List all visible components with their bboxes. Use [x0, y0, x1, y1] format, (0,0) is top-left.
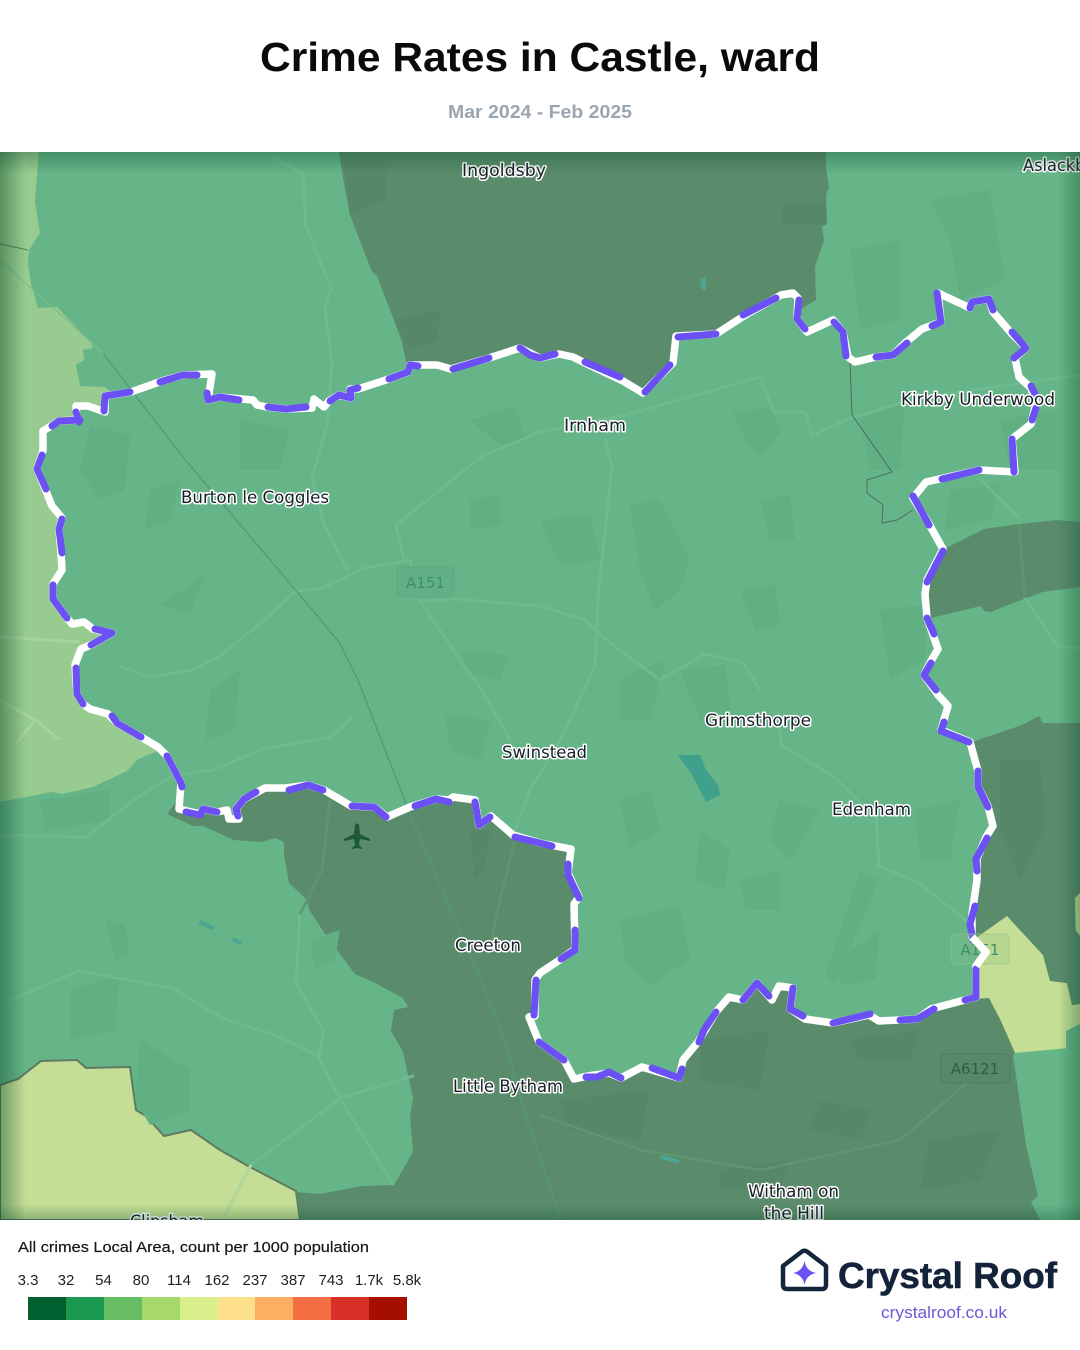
legend scale labels: 1.7k [355, 1272, 384, 1289]
woodland patches [40, 190, 1060, 1125]
roads [0, 157, 1080, 1184]
legend scale labels: 114 [167, 1272, 191, 1289]
legend scale labels: 237 [242, 1272, 268, 1289]
water: small ponds [198, 276, 706, 1163]
railway line [0, 260, 103, 353]
road shield: A6121: A6121 [951, 1060, 999, 1078]
place labels: Ingoldsby [462, 161, 546, 181]
legend scale labels: 32 [58, 1272, 74, 1289]
road shield: A151 east [951, 934, 1009, 964]
icon: airport plane [344, 823, 370, 849]
place labels: Edenham [832, 800, 911, 820]
legend scale labels: 387 [280, 1272, 306, 1289]
legend scale labels [18, 1272, 422, 1289]
region: dark green east band [900, 520, 1080, 630]
region: light green west [0, 152, 170, 802]
road shield: A151 east: A151 [961, 941, 999, 959]
place labels [130, 156, 1080, 1232]
road on yellow-green south-west [225, 1165, 251, 1215]
legend scale labels: 743 [318, 1272, 344, 1289]
ward fill [37, 293, 1036, 1079]
legend scale labels: 5.8k [393, 1272, 422, 1289]
boundary over shield [972, 937, 986, 966]
icon: house with star [783, 1251, 826, 1289]
region: yellow-green south-east [960, 916, 1080, 1053]
water: lake at Grimsthorpe [678, 755, 720, 802]
legend title: All crimes Local Area, count per 1000 population [18, 1239, 369, 1256]
place labels: Little Bytham [453, 1077, 563, 1097]
place labels: Kirkby Underwood [901, 390, 1055, 410]
legend scale labels: 162 [204, 1272, 230, 1289]
place labels: Grimsthorpe [705, 711, 811, 731]
area boundary line west [0, 244, 28, 250]
ward boundary: purple dashes [37, 293, 1036, 1078]
legend colour bar [28, 1297, 407, 1320]
road shield: A151 west [397, 567, 454, 597]
legend scale labels: 80 [133, 1272, 149, 1289]
roads on dark regions [300, 524, 1025, 1170]
roads on light green west [0, 637, 80, 745]
region: dark green east [960, 716, 1080, 1005]
place labels: Witham on [748, 1182, 839, 1202]
parish line near Kirkby Underwood [850, 362, 913, 523]
road shield: A6121 [941, 1054, 1010, 1083]
dark region texture patches [344, 160, 1045, 1190]
legend scale labels: 3.3 [18, 1272, 38, 1289]
place labels: Swinstead [502, 743, 587, 763]
place labels: Burton le Coggles [181, 488, 329, 508]
title: Crime Rates in Castle, ward [260, 34, 820, 80]
ward boundary: white casing [37, 293, 1036, 1079]
region: dark green south [167, 770, 1040, 1220]
subtitle: date range: Mar 2024 - Feb 2025 [448, 101, 632, 122]
place labels: Creeton [455, 936, 521, 956]
region: yellow-green south-west [0, 1060, 300, 1220]
website url: crystalroof.co.uk [881, 1304, 1008, 1322]
region: dark green north [339, 152, 829, 400]
wordmark: Crystal Roof [838, 1255, 1058, 1296]
logo: Crystal Roof [780, 1248, 1058, 1322]
legend [18, 1239, 422, 1320]
map [0, 152, 1080, 1220]
road shield: A151 west: A151 [406, 574, 445, 592]
place labels: Irnham [564, 416, 626, 436]
legend scale labels: 54 [95, 1272, 112, 1289]
